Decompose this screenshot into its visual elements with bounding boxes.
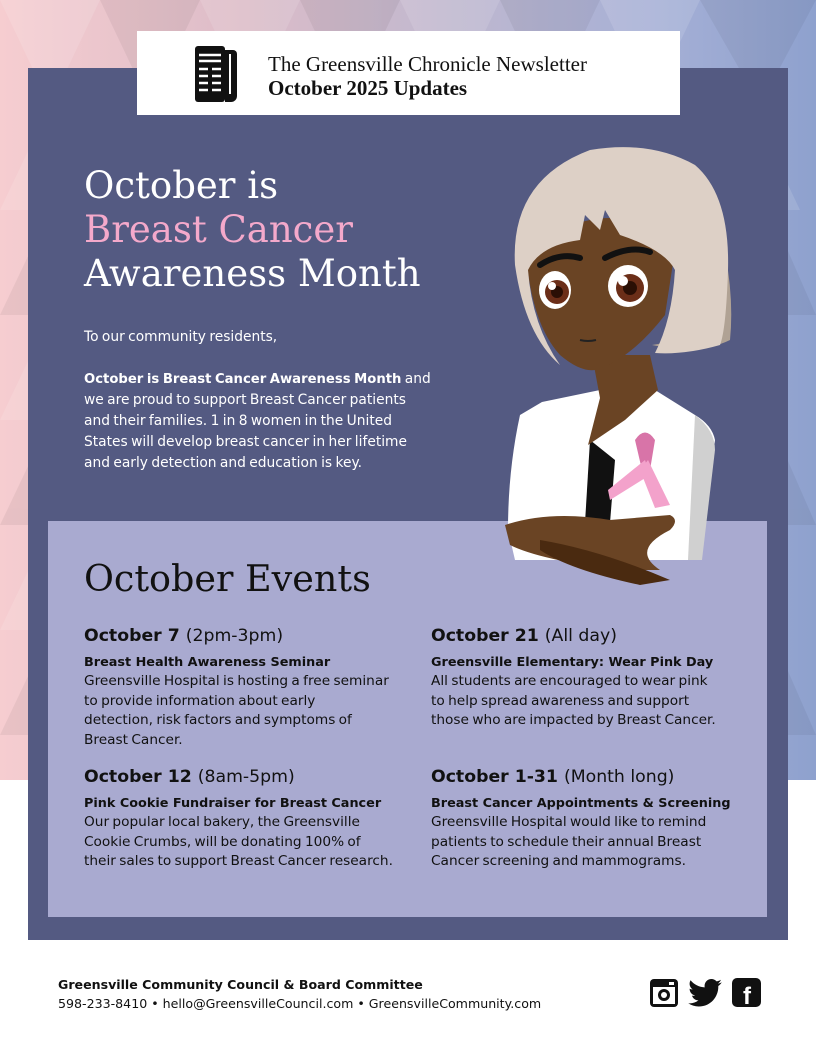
intro text: States will develop breast cancer in her lifetime xyxy=(84,434,407,450)
event: Oct 12: October 12 (8am-5pm) xyxy=(84,767,295,787)
event: Oct 21: Greensville Elementary: Wear Pink Day xyxy=(431,654,713,670)
event: Oct 7 xyxy=(84,626,389,748)
intro text: we are proud to support Breast Cancer patients xyxy=(84,392,406,408)
event: Oct 7: Breast Health Awareness Seminar xyxy=(84,654,330,670)
event: Oct 1-31: patients to schedule their annual Breast xyxy=(431,834,701,850)
event: Oct 21: All students are encouraged to wear pink xyxy=(431,673,708,689)
title: October is xyxy=(84,164,278,207)
event: Oct 1-31: Cancer screening and mammograms. xyxy=(431,853,686,869)
intro text xyxy=(84,329,431,471)
header text: October 2025 Updates xyxy=(268,76,467,100)
event: Oct 1-31 xyxy=(431,767,731,869)
event: Oct 12: their sales to support Breast Cancer research. xyxy=(84,853,393,869)
title xyxy=(84,164,421,295)
event: Oct 21: October 21 (All day) xyxy=(431,626,617,646)
event: Oct 1-31: October 1-31 (Month long) xyxy=(431,767,674,787)
icon: facebook xyxy=(732,978,761,1007)
illustration: woman with pink ribbon xyxy=(505,147,732,585)
event: Oct 12: Our popular local bakery, the Greensville xyxy=(84,814,360,830)
event: Oct 12: Cookie Crumbs, will be donating 100% of xyxy=(84,834,361,850)
event: Oct 1-31: Greensville Hospital would like to remind xyxy=(431,814,706,830)
header text xyxy=(268,52,587,100)
social icons xyxy=(650,978,761,1007)
footer text: Greensville Community Council & Board Committee xyxy=(58,977,423,992)
events panel xyxy=(48,521,767,917)
event: Oct 21: those who are impacted by Breast Cancer. xyxy=(431,712,716,728)
intro text: and their families. 1 in 8 women in the United xyxy=(84,413,392,429)
event: Oct 12 xyxy=(84,767,393,869)
event: Oct 7: Breast Cancer. xyxy=(84,732,183,748)
event: Oct 21: to help spread awareness and support xyxy=(431,692,689,708)
intro text: October is Breast Cancer Awareness Month and xyxy=(84,371,431,387)
event: Oct 7: October 7 (2pm-3pm) xyxy=(84,626,283,646)
footer text: 598-233-8410 • hello@GreensvilleCouncil.com • GreensvilleCommunity.com xyxy=(58,996,541,1011)
event: Oct 7: Greensville Hospital is hosting a free seminar xyxy=(84,673,389,689)
intro text: and early detection and education is key. xyxy=(84,455,362,471)
event: Oct 12: Pink Cookie Fundraiser for Breast Cancer xyxy=(84,796,381,810)
title: Awareness Month xyxy=(84,252,421,295)
header text: The Greensville Chronicle Newsletter xyxy=(268,52,587,76)
background pattern xyxy=(0,0,816,780)
event: Oct 21 xyxy=(431,626,716,728)
icon: newspaper xyxy=(195,46,237,102)
event: Oct 1-31: Breast Cancer Appointments & Screening xyxy=(431,796,731,810)
intro text: To our community residents, xyxy=(84,329,277,345)
event: Oct 7: to provide information about early xyxy=(84,692,315,708)
icon: instagram xyxy=(650,979,678,1007)
icon: twitter xyxy=(688,979,722,1006)
header box xyxy=(137,31,680,115)
event: Oct 7: detection, risk factors and symptoms of xyxy=(84,712,352,728)
events heading: October Events xyxy=(84,557,371,600)
title: Breast Cancer xyxy=(84,208,353,251)
footer text xyxy=(58,977,541,1011)
main panel xyxy=(28,68,788,940)
